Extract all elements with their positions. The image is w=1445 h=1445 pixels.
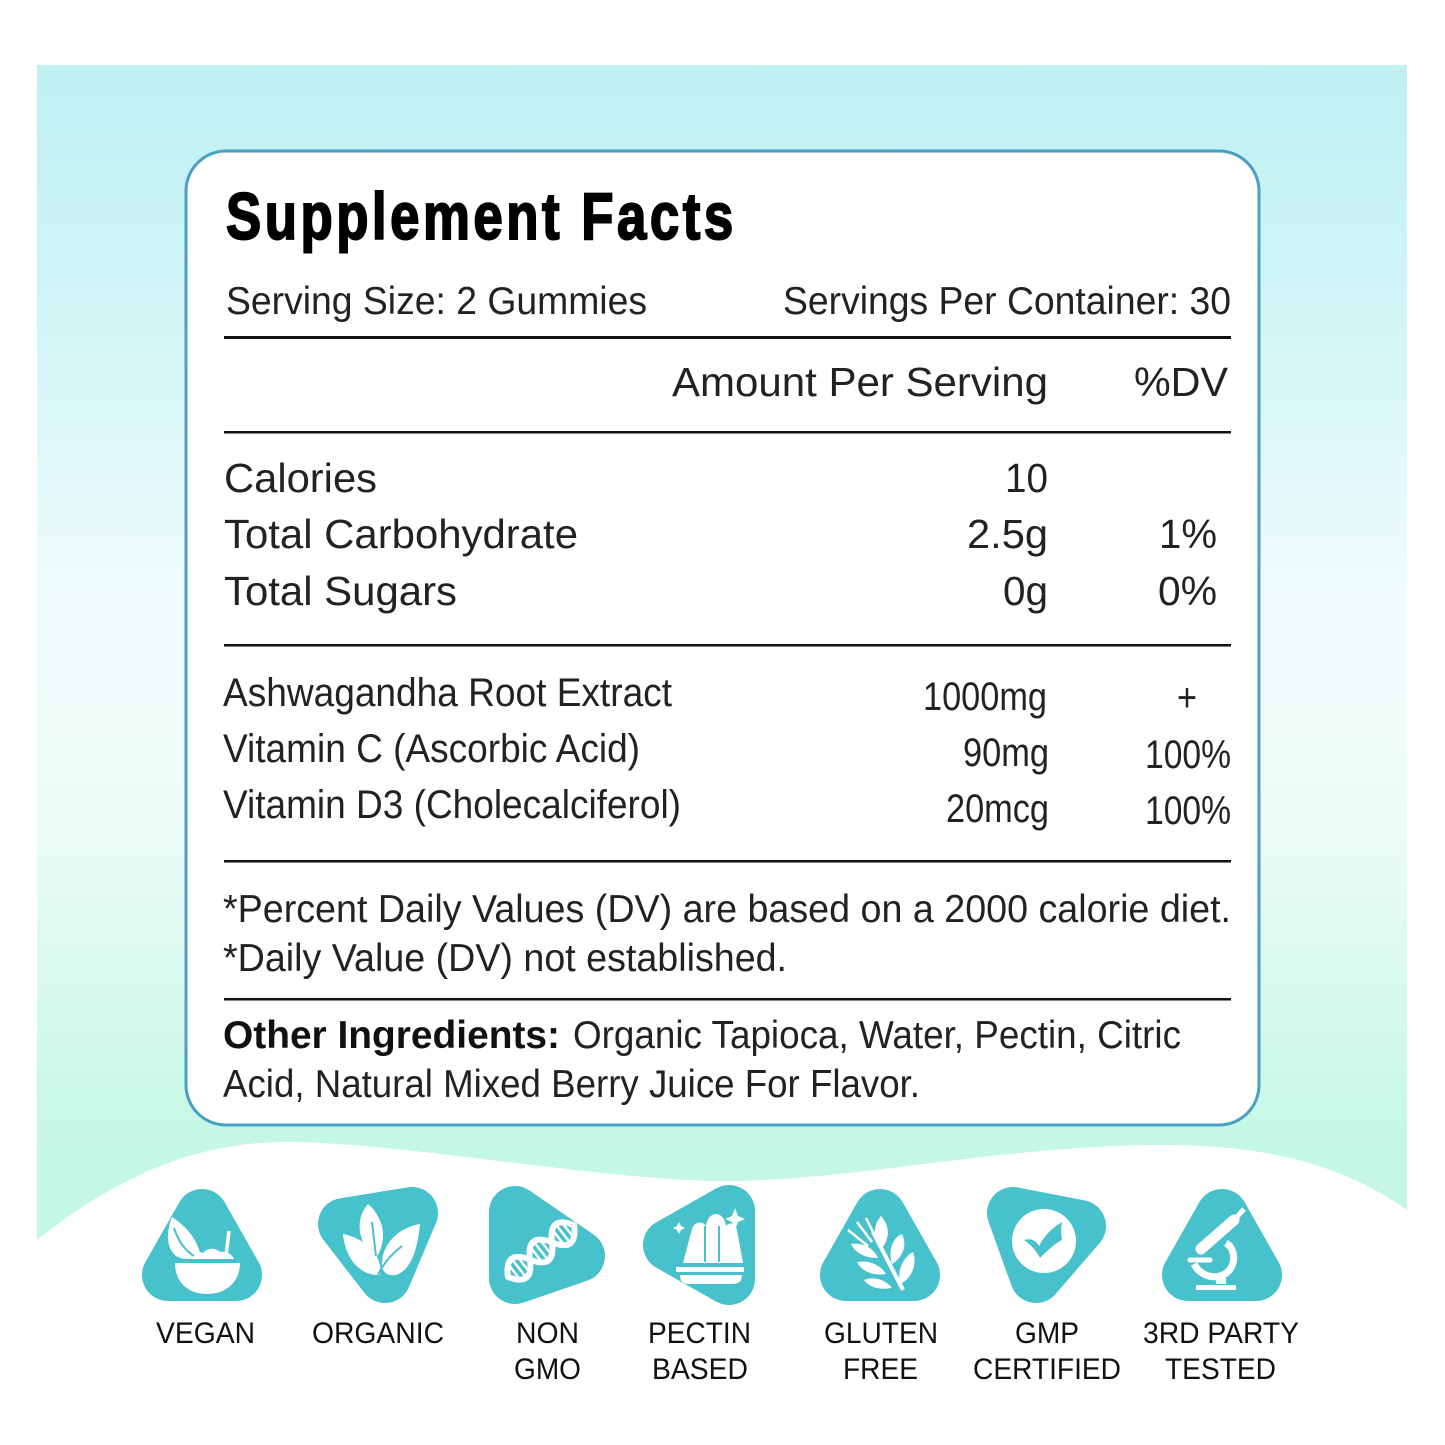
column headers xyxy=(672,359,1229,405)
icon: third party tested microscope xyxy=(1188,1209,1256,1290)
other ingredients: Other Ingredients: xyxy=(223,1014,560,1057)
badge labels: 3RD PARTY xyxy=(1143,1317,1299,1350)
ingredient rows: 90mg xyxy=(963,731,1049,775)
nutrition rows: Total Carbohydrate xyxy=(224,511,578,557)
ingredient rows: 100% xyxy=(1145,733,1231,777)
icon: dna non gmo xyxy=(501,1212,581,1286)
nutrition rows: 10 xyxy=(1005,455,1048,501)
icon: organic xyxy=(343,1204,420,1277)
nutrition rows: 2.5g xyxy=(967,511,1048,557)
nutrition rows: 0g xyxy=(1003,568,1048,614)
title: Supplement Facts xyxy=(226,179,733,253)
icon: gmp certified check xyxy=(1012,1209,1080,1277)
badge labels: FREE xyxy=(843,1353,918,1386)
serving information: Serving Size: 2 Gummies xyxy=(226,280,647,323)
badge labels: CERTIFIED xyxy=(973,1353,1121,1386)
ingredient rows: 1000mg xyxy=(923,675,1047,719)
daily value footnotes: *Daily Value (DV) not established. xyxy=(223,937,787,980)
badge labels: NON xyxy=(516,1317,579,1350)
ingredient rows: 20mcg xyxy=(946,787,1049,831)
column headers: %DV xyxy=(1134,359,1229,405)
nutrition rows: 1% xyxy=(1159,511,1217,557)
badge labels: TESTED xyxy=(1165,1353,1276,1386)
other ingredients xyxy=(223,1014,1181,1106)
ingredient rows: 100% xyxy=(1145,789,1231,833)
icon: vegan xyxy=(168,1215,240,1294)
ingredient rows: Ashwagandha Root Extract xyxy=(223,671,672,715)
daily value footnotes xyxy=(223,888,1231,980)
icon: gluten free wheat xyxy=(846,1215,915,1290)
badge labels xyxy=(156,1317,1299,1386)
nutrition rows: 0% xyxy=(1158,568,1217,614)
nutrition rows xyxy=(224,455,1217,614)
badge labels: PECTIN xyxy=(648,1317,751,1350)
white wave footer xyxy=(37,1142,1407,1445)
ingredient rows xyxy=(223,671,1231,833)
badge labels: GMP xyxy=(1015,1317,1079,1350)
badge labels: GLUTEN xyxy=(824,1317,938,1350)
other ingredients: Acid, Natural Mixed Berry Juice For Flavor. xyxy=(223,1063,920,1106)
icon: pectin jelly xyxy=(669,1208,745,1284)
ingredient rows: Vitamin C (Ascorbic Acid) xyxy=(223,727,640,771)
badge labels: BASED xyxy=(652,1353,748,1386)
badge labels: GMO xyxy=(514,1353,581,1386)
ingredient rows: + xyxy=(1177,676,1197,720)
ingredient rows: Vitamin D3 (Cholecalciferol) xyxy=(223,783,681,827)
nutrition rows: Calories xyxy=(224,455,377,501)
nutrition rows: Total Sugars xyxy=(224,568,457,614)
panel: supplement facts card xyxy=(186,151,1259,1125)
serving information: Servings Per Container: 30 xyxy=(783,280,1231,323)
gradient background xyxy=(37,65,1407,1245)
badge labels: ORGANIC xyxy=(312,1317,444,1350)
daily value footnotes: *Percent Daily Values (DV) are based on a 2000 calorie diet. xyxy=(223,888,1231,931)
badge labels: VEGAN xyxy=(156,1317,255,1350)
serving information xyxy=(226,280,1231,323)
other ingredients: Organic Tapioca, Water, Pectin, Citric xyxy=(573,1014,1181,1057)
column headers: Amount Per Serving xyxy=(672,359,1048,405)
